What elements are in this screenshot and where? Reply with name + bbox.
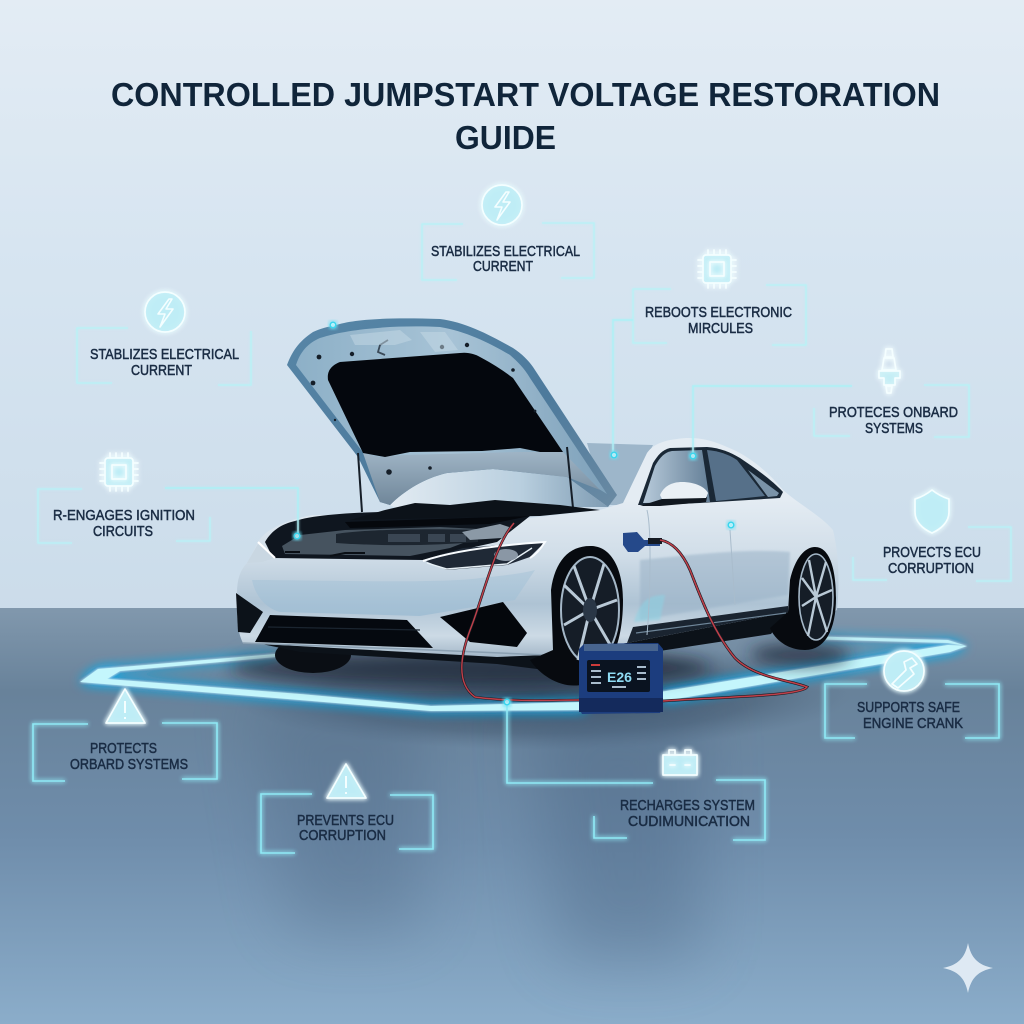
lower grille	[255, 615, 433, 648]
background wall	[0, 0, 1024, 612]
hood rim	[287, 318, 617, 507]
callout: stabilizes electrical current (top)	[422, 185, 594, 280]
hood struts	[358, 447, 573, 512]
charging port	[623, 532, 662, 552]
hood inner panel	[296, 326, 607, 497]
icon: lightning bolt	[145, 292, 185, 332]
callout: stabilizes electrical current (left)	[77, 292, 336, 385]
sill	[627, 606, 788, 643]
connector node	[330, 322, 336, 328]
left vent	[236, 593, 263, 633]
hood lower frame	[363, 452, 600, 505]
callout: prevents ecu corruption (floor)	[261, 764, 433, 853]
label text	[620, 798, 755, 830]
label text	[431, 244, 580, 275]
label text: STABILIZES ELECTRICAL	[431, 244, 580, 260]
far windshield glass	[587, 443, 653, 505]
label text: CORRUPTION	[888, 561, 974, 577]
label text: CURRENT	[131, 363, 192, 379]
icon: shield	[915, 490, 949, 533]
callout: protects onboard systems (floor)	[33, 689, 217, 781]
label text: REBOOTS ELECTRONIC	[645, 305, 792, 321]
label text: SUPPORTS SAFE	[857, 700, 960, 716]
label text: CURRENT	[473, 259, 533, 275]
bumper lip	[243, 643, 545, 655]
connector node	[611, 452, 617, 458]
callout: prevents ecu corruption (right)	[728, 490, 1011, 581]
car	[230, 318, 850, 714]
callout: reboots electronic modules	[611, 250, 806, 458]
icon: chip	[100, 453, 138, 491]
jumper cable front	[462, 523, 580, 700]
icon: warning triangle	[106, 689, 145, 723]
label text: MIRCULES	[688, 321, 753, 337]
label text: CIRCUITS	[93, 524, 153, 540]
door reflection	[634, 595, 665, 622]
connector node	[728, 522, 734, 528]
label text: R-ENGAGES IGNITION	[53, 508, 195, 524]
front wheel	[530, 546, 623, 686]
floor shadow	[230, 650, 710, 686]
label text: PREVENTS ECU	[297, 813, 394, 829]
right vent	[440, 602, 527, 647]
label text: STABLIZES ELECTRICAL	[90, 347, 239, 363]
label text: CUDIMUNICATION	[628, 814, 750, 830]
connector	[165, 488, 298, 534]
sill stripe	[636, 613, 786, 633]
underbody	[243, 612, 788, 670]
left lamp	[247, 542, 275, 563]
callout: supports safe engine crank	[825, 651, 999, 738]
fascia recess	[252, 570, 535, 616]
label text: CORRUPTION	[299, 828, 386, 844]
connector node	[504, 699, 510, 705]
icon: warning triangle	[327, 764, 366, 798]
icon: spark plug	[879, 349, 900, 393]
jump starter unit	[579, 643, 663, 714]
open hood	[287, 318, 617, 507]
hood emblem	[378, 340, 388, 355]
rear wheel	[770, 547, 836, 650]
side mirror	[640, 482, 708, 506]
callout: re-engages ignition circuits	[38, 453, 300, 543]
label text	[829, 405, 958, 437]
reflective floor	[0, 608, 1024, 1024]
connector	[613, 320, 633, 453]
title: CONTROLLED JUMPSTART VOLTAGE RESTORATION	[111, 76, 940, 113]
callout: recharges system communication	[504, 699, 765, 840]
label text: PROTECES ONBARD	[829, 405, 958, 421]
connector node	[690, 453, 696, 459]
icon: starter	[884, 651, 924, 691]
label text	[70, 741, 188, 773]
label text	[883, 545, 981, 577]
body shell	[237, 438, 838, 657]
label text	[90, 347, 239, 379]
headlight	[423, 542, 545, 570]
jump starter unit: E26	[607, 669, 632, 685]
label text	[857, 700, 963, 732]
label text: RECHARGES SYSTEM	[620, 798, 755, 814]
title	[111, 76, 940, 156]
glowing floor outline	[80, 636, 967, 711]
label text	[53, 508, 195, 540]
icon: chip	[698, 250, 736, 288]
icon: lightning bolt	[482, 185, 522, 225]
door lower shading	[640, 551, 790, 620]
jumper cable side	[660, 540, 807, 701]
title: GUIDE	[455, 119, 556, 156]
connector	[693, 386, 852, 454]
side windows	[638, 447, 783, 505]
connector node	[294, 533, 300, 539]
label text	[297, 813, 394, 844]
windshield	[390, 469, 608, 510]
label text: ENGINE CRANK	[863, 716, 963, 732]
callout: protects onboard systems	[690, 349, 969, 459]
grille slats	[268, 627, 420, 630]
label text: PROTECTS	[90, 741, 157, 757]
hood insulation	[328, 353, 563, 457]
connector	[507, 704, 653, 783]
connector	[205, 324, 331, 326]
hood pressings	[350, 330, 458, 352]
connector	[733, 524, 895, 526]
far side tyre	[275, 637, 351, 673]
label text: SYSTEMS	[865, 421, 923, 437]
icon: sparkle watermark	[943, 943, 993, 993]
label text	[645, 305, 792, 337]
wipers	[350, 500, 600, 520]
label text: PROVECTS ECU	[883, 545, 981, 561]
rear wheel floor shadow	[750, 643, 850, 667]
engine bay	[265, 512, 530, 560]
icon: battery	[663, 750, 697, 775]
label text: ORBARD SYSTEMS	[70, 757, 188, 773]
door seam	[647, 510, 735, 635]
